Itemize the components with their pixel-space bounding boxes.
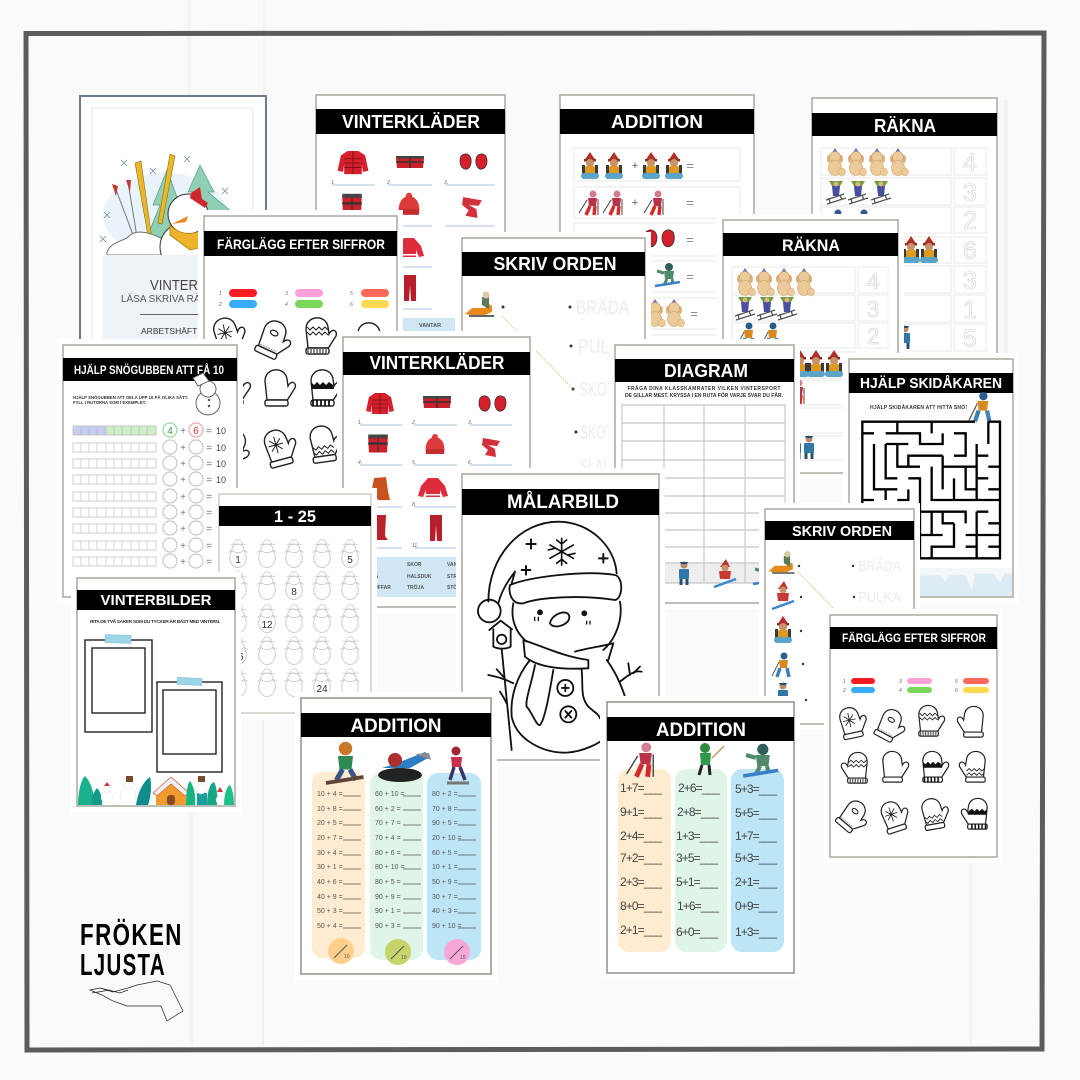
worksheet: Hjälp snögubben bbox=[57, 339, 243, 603]
worksheet: Hjälp skidåkaren: HJÄLP SKIDÅKAREN ATT HITTA SNÖ! bbox=[870, 404, 967, 411]
worksheet: Addition picture sums: = bbox=[686, 232, 694, 247]
answer rows: = bbox=[206, 524, 212, 535]
worksheet: Addition columns small sums: 2+1=___ bbox=[735, 875, 777, 889]
worksheet: Vinterkläder back bbox=[316, 95, 505, 335]
worksheet: cover: VINTER bbox=[150, 277, 198, 294]
worksheet: Färglägg efter siffror front: 4 bbox=[899, 688, 902, 694]
photo frame left bbox=[85, 635, 152, 732]
worksheet: Vinterkläder front: STRUMPOR bbox=[447, 574, 476, 580]
worksheet: Addition picture sums: = bbox=[686, 195, 694, 210]
worksheet: Addition columns small sums: 9+1=___ bbox=[620, 805, 662, 819]
worksheet: Skriv orden front bbox=[759, 503, 920, 730]
worksheet: Addition columns large: 40 + 9 = bbox=[317, 894, 343, 901]
worksheet: cover: LÄSA SKRIVA RÄKNA bbox=[121, 293, 221, 305]
worksheet: Skriv orden back: SLALOM bbox=[580, 457, 630, 478]
worksheet: Skriv orden back bbox=[456, 232, 651, 478]
worksheet: Räkna small: RÄKNA bbox=[782, 236, 840, 255]
answer rows: 10 bbox=[216, 557, 226, 567]
worksheet: Addition columns large: 80 + 2 = bbox=[432, 791, 458, 798]
worksheet: Addition columns large: 60 + 2 = bbox=[375, 806, 401, 813]
worksheet: Addition columns small sums: 2+1=___ bbox=[620, 923, 662, 937]
worksheet: Hjälp snögubben: HJÄLP SNÖGUBBEN ATT DELA UPP 10 PÅ OLIKA SÄTT. bbox=[73, 395, 188, 400]
worksheet: Addition columns small sums: 5+3=___ bbox=[735, 851, 777, 865]
worksheet: Vinterkläder front: STÖVLAR bbox=[447, 584, 471, 591]
worksheet: Räkna large: 5 bbox=[963, 325, 977, 353]
worksheet: Addition columns large: 30 + 4 = bbox=[317, 850, 343, 857]
worksheet: Vinterkläder front bbox=[337, 331, 536, 613]
worksheet: Addition columns large: 70 + 8 = bbox=[432, 806, 458, 813]
score badges: 10 bbox=[460, 955, 466, 961]
answer rows: + bbox=[180, 492, 186, 503]
worksheet: Addition columns large: 60 + 10 = bbox=[375, 791, 405, 798]
score badges: 10 bbox=[401, 955, 407, 961]
worksheet: Addition columns large: 90 + 3 = bbox=[375, 923, 401, 930]
worksheet: Skriv orden back: SKOTER bbox=[579, 380, 634, 401]
answer rows: = bbox=[206, 475, 212, 486]
worksheet: Skriv orden back: BRÄDA bbox=[576, 298, 629, 319]
worksheet: Hjälp skidåkaren bbox=[843, 353, 1019, 603]
score badges: 10 bbox=[344, 954, 350, 960]
worksheet: Addition columns small sums: 7+2=___ bbox=[620, 851, 662, 865]
answer rows: + bbox=[180, 541, 186, 552]
worksheet: Addition columns large: 20 + 7 = bbox=[317, 835, 343, 842]
answer rows bbox=[73, 440, 226, 568]
worksheet: Addition columns large: 80 + 6 = bbox=[375, 850, 401, 857]
worksheet: Räkna small: 3 bbox=[867, 296, 879, 322]
worksheet: Vinterkläder front: HALSDUK bbox=[407, 574, 432, 580]
worksheet: Räkna large: 3 bbox=[963, 267, 977, 295]
ten-frame row with example: = bbox=[206, 426, 212, 437]
worksheet: Addition columns large: 60 + 5 = bbox=[432, 850, 458, 857]
worksheet: Räkna large: 2 bbox=[963, 207, 977, 235]
worksheet: Färglägg efter siffror back: 2 bbox=[218, 302, 222, 308]
worksheet: Addition columns small sums: 5+1=___ bbox=[676, 875, 718, 889]
worksheet: Räkna small: 2 bbox=[867, 323, 879, 349]
worksheet: Addition columns small sums: 2+3=___ bbox=[620, 875, 662, 889]
worksheet: Räkna large: 6 bbox=[963, 237, 977, 265]
worksheet: Addition picture sums: + bbox=[632, 197, 638, 209]
worksheet: Addition columns large: 90 + 5 = bbox=[432, 820, 458, 827]
answer rows: = bbox=[206, 492, 212, 503]
worksheet: Addition columns small sums: 1+6=___ bbox=[677, 899, 719, 913]
worksheet: Addition picture sums: = bbox=[686, 158, 694, 173]
worksheet: Addition picture sums: = bbox=[686, 269, 694, 284]
answer rows: = bbox=[206, 541, 212, 552]
answer rows: + bbox=[180, 443, 186, 454]
answer rows: + bbox=[180, 459, 186, 470]
worksheet: Vinterkläder back: 2. bbox=[386, 180, 391, 186]
worksheet: Räkna small bbox=[717, 214, 904, 479]
worksheet: Räkna large: 3 bbox=[963, 179, 977, 207]
worksheet: Färglägg efter siffror back: 3 bbox=[285, 291, 288, 297]
worksheet: Vinterkläder front: 8. bbox=[412, 502, 416, 508]
answer rows: = bbox=[206, 443, 212, 454]
worksheet: Färglägg efter siffror back: 5 bbox=[350, 291, 353, 297]
worksheet: Färglägg efter siffror front: FÄRGLÄGG EFTER SIFFROR bbox=[842, 630, 986, 645]
worksheet: Addition columns small sums: 3+5=___ bbox=[676, 851, 718, 865]
worksheet: Hjälp snögubben: HJÄLP SNÖGUBBEN ATT FÅ 10 bbox=[74, 362, 224, 377]
worksheet: Addition picture sums bbox=[560, 95, 754, 355]
worksheet: Addition columns small sums: 6+0=___ bbox=[676, 925, 718, 939]
worksheet: Addition columns small sums: 5+3=___ bbox=[735, 782, 777, 796]
worksheet: Addition columns large: ADDITION bbox=[350, 716, 442, 737]
worksheet: Addition columns large: 70 + 4 = bbox=[375, 835, 401, 842]
worksheet: Vinterkläder front: VINTERKLÄDER bbox=[370, 353, 504, 373]
worksheet: 1 - 25 snowmen bbox=[213, 488, 377, 719]
worksheet: Vinterkläder front: 11. bbox=[412, 543, 419, 549]
worksheet: Addition columns large: 50 + 4 = bbox=[317, 923, 343, 930]
worksheet: Addition columns small sums: 1+7=___ bbox=[735, 829, 777, 843]
worksheet: Addition columns small sums: 2+4=___ bbox=[620, 829, 662, 843]
worksheet: 1 - 25 snowmen: 12 bbox=[261, 620, 273, 631]
worksheet: Vinterkläder back: VANTAR bbox=[419, 323, 441, 329]
worksheet: Addition columns large: 80 + 10 = bbox=[375, 864, 405, 871]
worksheet: Färglägg efter siffror front: 2 bbox=[842, 688, 846, 694]
answer rows: = bbox=[206, 459, 212, 470]
worksheet: 1 - 25 snowmen: 8 bbox=[291, 587, 297, 598]
worksheet: Addition columns large: 10 + 1 = bbox=[432, 864, 458, 871]
worksheet: 1 - 25 snowmen: 1 - 25 bbox=[274, 507, 316, 526]
worksheet: Målarbild snowman bbox=[456, 468, 665, 766]
winter village scene bbox=[78, 776, 234, 805]
answer rows: = bbox=[206, 508, 212, 519]
worksheet: cover bbox=[80, 96, 266, 356]
answer rows: 10 bbox=[216, 459, 226, 469]
worksheet: Färglägg efter siffror back: 6 bbox=[350, 302, 353, 308]
worksheet: Vinterbilder bbox=[71, 572, 241, 812]
ten-frame row with example: 10 bbox=[216, 426, 226, 436]
worksheet: Vinterkläder front: VANTAR bbox=[447, 562, 467, 568]
worksheet: Färglägg efter siffror front: 3 bbox=[899, 679, 902, 685]
worksheet: Hjälp snögubben: FYLL I RUTORNA SOM I EXEMPLET. bbox=[73, 400, 146, 405]
worksheet: Addition columns large: 50 + 9 = bbox=[432, 879, 458, 886]
worksheet: 1 - 25 snowmen: 24 bbox=[316, 684, 328, 695]
worksheet: Addition columns small sums: 1+3=___ bbox=[735, 925, 777, 939]
score badges bbox=[328, 938, 470, 965]
worksheet: Skriv orden back: SKRIV ORDEN bbox=[494, 254, 616, 274]
brand logo: Fröken Ljusta: LJUSTA bbox=[80, 947, 166, 982]
worksheet: Addition columns large: 70 + 7 = bbox=[375, 820, 401, 827]
worksheet: Diagram: DIAGRAM bbox=[664, 361, 748, 381]
icon: snowman bbox=[193, 373, 220, 415]
worksheet: Addition columns large: 90 + 10 = bbox=[432, 923, 462, 930]
worksheet: Addition columns large: 80 + 5 = bbox=[375, 879, 401, 886]
icon: skier girl bbox=[447, 746, 469, 783]
icon: open hand bbox=[90, 981, 183, 1021]
worksheet: Räkna large bbox=[812, 98, 997, 360]
worksheet: Addition columns small sums: 1+3=___ bbox=[676, 829, 718, 843]
ten-frame row with example: 6 bbox=[193, 426, 199, 437]
photo frame right bbox=[157, 677, 222, 772]
answer rows: + bbox=[180, 508, 186, 519]
worksheet: Addition picture sums: ADDITION bbox=[611, 112, 703, 132]
worksheet: Räkna small: 4 bbox=[867, 268, 880, 294]
snowy mountains strip bbox=[918, 568, 1012, 596]
ten-frame row with example: + bbox=[180, 426, 186, 437]
worksheet: Vinterkläder back: 1. bbox=[331, 180, 335, 186]
worksheet: Vinterbilder: VINTERBILDER bbox=[100, 593, 212, 609]
worksheet: Addition columns large: 40 + 6 = bbox=[317, 879, 343, 886]
worksheet: Skriv orden front: PULKA bbox=[858, 589, 901, 606]
worksheet: Skriv orden front: SKRIV ORDEN bbox=[792, 523, 892, 540]
worksheet: Hjälp skidåkaren: HJÄLP SKIDÅKAREN bbox=[860, 375, 1002, 392]
worksheet: Vinterkläder front: TRÖJA bbox=[407, 584, 424, 591]
icon: hockey player bbox=[699, 743, 724, 775]
worksheet: Addition columns small sums bbox=[600, 696, 800, 979]
worksheet: Addition columns large: 90 + 9 = bbox=[375, 894, 401, 901]
answer rows: 10 bbox=[216, 508, 226, 518]
worksheet: Vinterkläder front: SKOR bbox=[407, 562, 422, 568]
worksheet: Vinterkläder front: JACKA bbox=[360, 562, 378, 568]
worksheet: Vinterkläder front: 3. bbox=[468, 420, 472, 426]
chart grid bbox=[622, 405, 785, 587]
answer rows: 10 bbox=[216, 443, 226, 453]
worksheet: Skriv orden back: PULKA bbox=[578, 337, 631, 358]
ten-frame row with example bbox=[73, 423, 226, 437]
worksheet: Addition picture sums: = bbox=[690, 306, 698, 321]
worksheet: Räkna large: 4 bbox=[963, 149, 977, 177]
worksheet: 1 - 25 snowmen: 1 bbox=[235, 555, 241, 566]
answer rows: = bbox=[206, 557, 212, 568]
answer rows: + bbox=[180, 557, 186, 568]
worksheet: Diagram: DE GILLAR MEST. KRYSSA I EN RUTA FÖR VARJE SVAR DU FÅR. bbox=[625, 392, 784, 399]
brand logo: Fröken Ljusta bbox=[80, 917, 183, 1021]
worksheet: Vinterkläder front: 5. bbox=[412, 460, 416, 466]
icon: snowboarder green bbox=[326, 742, 364, 783]
icon: tube sledder bbox=[378, 752, 431, 782]
worksheet: Skriv orden front: BRÄDA bbox=[858, 558, 901, 575]
worksheet: Målarbild snowman: MÅLARBILD bbox=[507, 492, 619, 513]
worksheet: cover: ARBETSHÄFTE bbox=[141, 326, 203, 336]
worksheet: 1 - 25 snowmen: 16 bbox=[232, 652, 244, 663]
worksheet: Addition columns large: 50 + 3 = bbox=[317, 908, 343, 915]
worksheet: Diagram: FRÅGA DINA KLASSKAMRATER VILKEN VINTERSPORT bbox=[628, 385, 780, 392]
worksheet: Addition columns large: 30 + 7 = bbox=[432, 894, 458, 901]
worksheet: Vinterkläder back: 3. bbox=[444, 180, 448, 186]
worksheet: Färglägg efter siffror back: 4 bbox=[285, 302, 288, 308]
worksheet: Räkna large: 1 bbox=[963, 296, 977, 324]
worksheet: Vinterkläder back: VINTERKLÄDER bbox=[342, 112, 480, 132]
worksheet: Addition columns small sums: 0+9=___ bbox=[735, 899, 777, 913]
brand logo: Fröken Ljusta: FRÖKEN bbox=[80, 917, 183, 952]
worksheet: Addition columns large: 20 + 10 = bbox=[432, 835, 462, 842]
worksheet: Addition columns small sums: 8+0=___ bbox=[620, 899, 662, 913]
worksheet: Addition columns small sums: 5+5=___ bbox=[735, 806, 777, 820]
worksheet: Vinterkläder front: MÖSSA bbox=[360, 573, 379, 580]
worksheet: Addition columns large: 90 + 1 = bbox=[375, 908, 401, 915]
snowman coloring picture bbox=[478, 522, 642, 753]
worksheet: Addition columns small sums: 2+8=___ bbox=[677, 805, 719, 819]
worksheet: Addition columns large: 40 + 3 = bbox=[432, 908, 458, 915]
worksheet: Addition columns large bbox=[295, 692, 497, 980]
worksheet: Färglägg efter siffror front: 6 bbox=[955, 688, 958, 694]
answer rows: 10 bbox=[216, 524, 226, 534]
answer rows: 10 bbox=[216, 492, 226, 502]
worksheet: Addition columns large: 10 + 4 = bbox=[317, 791, 343, 798]
worksheet: Färglägg efter siffror back: 1 bbox=[219, 291, 222, 297]
maze bbox=[862, 422, 1000, 558]
worksheet: Vinterkläder front: 2. bbox=[411, 420, 416, 426]
worksheet: Färglägg efter siffror front: 1 bbox=[843, 679, 846, 685]
worksheet: Räkna large: RÄKNA bbox=[874, 116, 936, 136]
worksheet: Skriv orden back: SKOTER bbox=[580, 423, 630, 444]
worksheet: Addition columns large: 10 + 8 = bbox=[317, 806, 343, 813]
answer rows: 10 bbox=[216, 475, 226, 485]
worksheet: Addition picture sums: + bbox=[632, 160, 638, 172]
worksheet: Addition columns small sums: 2+6=___ bbox=[678, 781, 720, 795]
worksheet: Vinterkläder front: TUMPUFFAR bbox=[360, 585, 391, 591]
worksheet: Addition columns large: 30 + 1 = bbox=[317, 864, 343, 871]
worksheet: Addition columns small sums: 1+7=___ bbox=[620, 781, 662, 795]
worksheet: Addition columns small sums: ADDITION bbox=[656, 720, 746, 741]
worksheet: Addition columns large: 20 + 5 = bbox=[317, 820, 343, 827]
answer rows: + bbox=[180, 524, 186, 535]
worksheet: Vinterbilder: RITA DE TVÅ SAKER SOM DU TYCKER ÄR BÄST MED VINTERN. bbox=[90, 618, 220, 625]
worksheet: Vinterkläder front: 4. bbox=[358, 460, 362, 466]
worksheet: Färglägg efter siffror front: 5 bbox=[955, 679, 958, 685]
worksheet: Färglägg efter siffror front bbox=[824, 609, 1003, 863]
answer rows: + bbox=[180, 475, 186, 486]
worksheet: Färglägg efter siffror back bbox=[198, 210, 403, 500]
worksheet: 1 - 25 snowmen: 5 bbox=[347, 555, 353, 566]
worksheet: Diagram bbox=[609, 339, 800, 609]
worksheet: Vinterkläder front: 1. bbox=[358, 420, 362, 426]
ten-frame row with example: 4 bbox=[167, 426, 173, 437]
answer rows: 10 bbox=[216, 541, 226, 551]
worksheet: Färglägg efter siffror back: FÄRGLÄGG EFTER SIFFROR bbox=[217, 236, 385, 252]
worksheet: Vinterkläder front: 6. bbox=[468, 460, 472, 466]
